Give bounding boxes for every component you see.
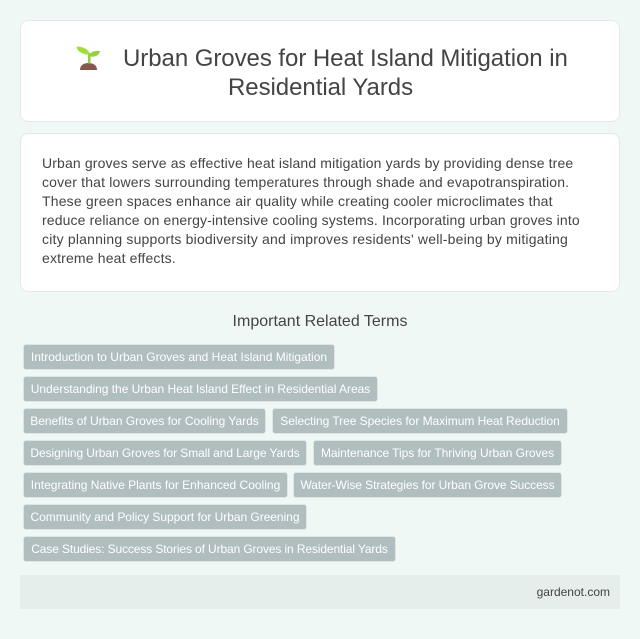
- title: Residential Yards: [228, 74, 413, 101]
- footer source: gardenot.com: [537, 585, 610, 599]
- tag: [23, 376, 378, 402]
- tag: [23, 408, 266, 434]
- tag: Introduction to Urban Groves and Heat Island Mitigation: [31, 350, 327, 364]
- description text: cover that lowers surrounding temperatures through shade and evapotranspiration.: [42, 174, 569, 190]
- tag: [293, 472, 562, 498]
- description text: city planning supports biodiversity and improves residents' well-being by mitigating: [42, 231, 568, 247]
- tag: Community and Policy Support for Urban Greening: [31, 510, 299, 524]
- tag: Benefits of Urban Groves for Cooling Yards: [30, 414, 259, 428]
- tag: [23, 472, 288, 498]
- tag: Understanding the Urban Heat Island Effect in Residential Areas: [31, 382, 370, 396]
- title: Urban Groves for Heat Island Mitigation in: [123, 45, 568, 72]
- tag: Designing Urban Groves for Small and Large Yards: [30, 446, 300, 460]
- tags panel: [23, 344, 568, 562]
- description card: [20, 133, 620, 292]
- tag: [23, 504, 307, 530]
- tag: Water-Wise Strategies for Urban Grove Success: [300, 478, 555, 492]
- tag: [23, 536, 396, 562]
- icon: seedling: [76, 46, 100, 70]
- header card: [20, 20, 620, 122]
- footer bar: [20, 575, 620, 609]
- tag: [23, 344, 335, 370]
- tag: Selecting Tree Species for Maximum Heat Reduction: [280, 414, 560, 428]
- tag: Integrating Native Plants for Enhanced Cooling: [31, 478, 280, 492]
- tag: [23, 440, 307, 466]
- description text: reduce reliance on energy-intensive cooling systems. Incorporating urban groves into: [42, 212, 580, 228]
- title: [123, 45, 568, 101]
- description text: Urban groves serve as effective heat island mitigation yards by providing dense tree: [42, 155, 573, 171]
- related terms heading: Important Related Terms: [233, 313, 407, 330]
- description text: [42, 155, 580, 266]
- description text: These green spaces enhance air quality while creating cooler microclimates that: [42, 193, 553, 209]
- description text: extreme heat effects.: [42, 250, 176, 266]
- tag: Case Studies: Success Stories of Urban Groves in Residential Yards: [31, 542, 388, 556]
- tag: [313, 440, 562, 466]
- tag: Maintenance Tips for Thriving Urban Groves: [321, 446, 554, 460]
- tag: [272, 408, 568, 434]
